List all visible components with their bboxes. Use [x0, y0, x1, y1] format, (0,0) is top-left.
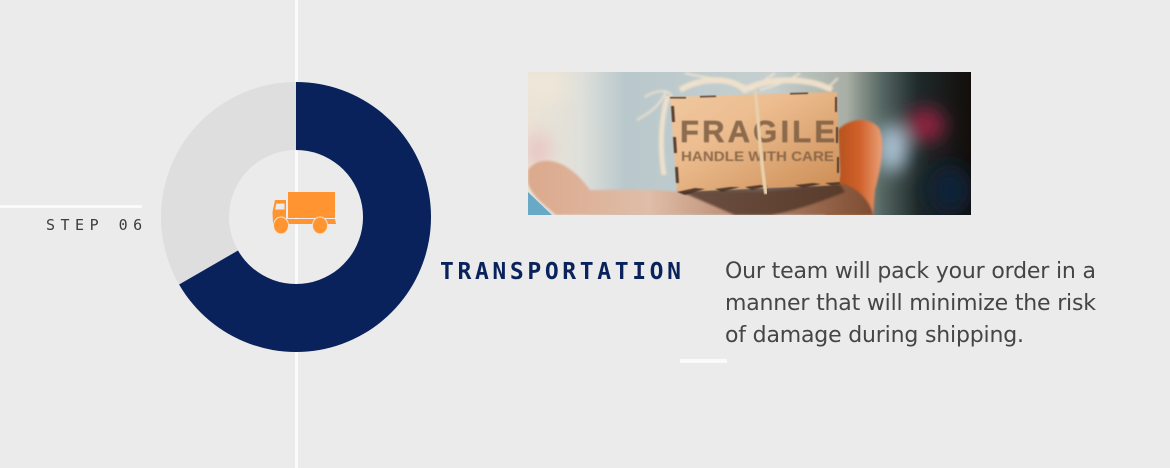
- description: [725, 259, 1096, 348]
- parcel shadow: [677, 184, 845, 215]
- donut chart: [161, 82, 431, 352]
- parcel label text: [681, 120, 835, 162]
- donut value segment: [179, 82, 431, 352]
- icon: truck: [272, 192, 336, 234]
- twine tuft: [637, 73, 838, 175]
- thumb: [825, 120, 882, 215]
- photo: fragile parcel on a hand: [523, 67, 972, 215]
- parcel stripes: [670, 92, 840, 195]
- parcel: [670, 92, 840, 192]
- corner of blue sky: [528, 192, 552, 215]
- description: Our team will pack your order in a: [725, 259, 1096, 284]
- parcel label text: HANDLE WITH CARE: [681, 149, 834, 164]
- step rule: [0, 205, 142, 208]
- twine: [755, 90, 766, 194]
- parcel label text: FRAGILE: [680, 114, 835, 149]
- photo backdrop: [528, 72, 971, 215]
- accent rule: [680, 359, 727, 363]
- palm and finger: [528, 161, 873, 215]
- donut remainder segment: [161, 82, 296, 284]
- step label: STEP 06: [46, 216, 148, 234]
- bokeh lights: [528, 80, 971, 215]
- description: of damage during shipping.: [725, 323, 1024, 348]
- vertical divider line: [295, 0, 298, 468]
- description: manner that will minimize the risk: [725, 291, 1096, 316]
- heading: TRANSPORTATION: [440, 259, 681, 285]
